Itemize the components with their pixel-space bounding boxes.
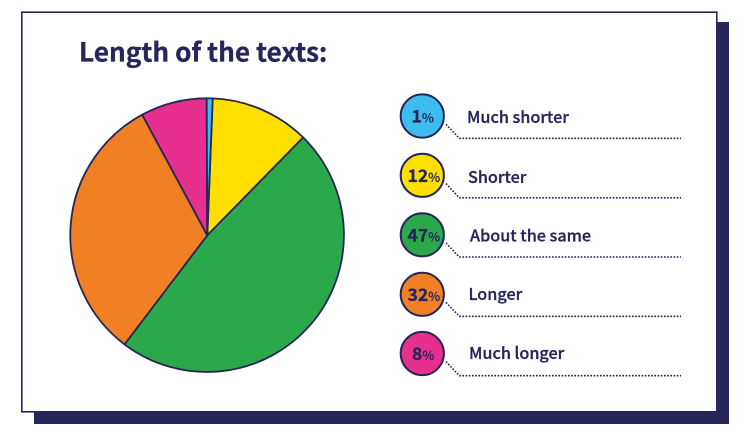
legend row: shorter <box>401 154 681 198</box>
legend row: longer <box>401 273 681 316</box>
pie chart <box>70 98 344 372</box>
slice: much longer 8% <box>142 98 207 235</box>
legend row: shorter: Shorter <box>468 164 527 188</box>
legend row: much longer: 8% <box>412 341 434 366</box>
legend row: much longer: Much longer <box>469 340 565 364</box>
legend row: much shorter <box>401 94 681 138</box>
slice: longer 32% <box>70 115 207 344</box>
slice: much shorter 1% <box>207 98 213 235</box>
legend row: shorter: 12% <box>408 163 440 188</box>
legend row: much shorter: Much shorter <box>467 104 569 128</box>
legend row: longer: Longer <box>468 281 523 305</box>
legend row: longer: 32% <box>408 282 440 307</box>
legend row: much longer <box>401 332 681 376</box>
legend row: about the same <box>401 213 681 257</box>
title: Length of the texts: <box>79 32 327 70</box>
legend row: about the same: 47% <box>408 222 440 248</box>
slice: shorter 12% <box>207 98 303 235</box>
slice: about the same 47% <box>124 137 344 372</box>
legend row: much shorter: 1% <box>412 104 434 129</box>
legend row: about the same: About the same <box>470 223 591 247</box>
